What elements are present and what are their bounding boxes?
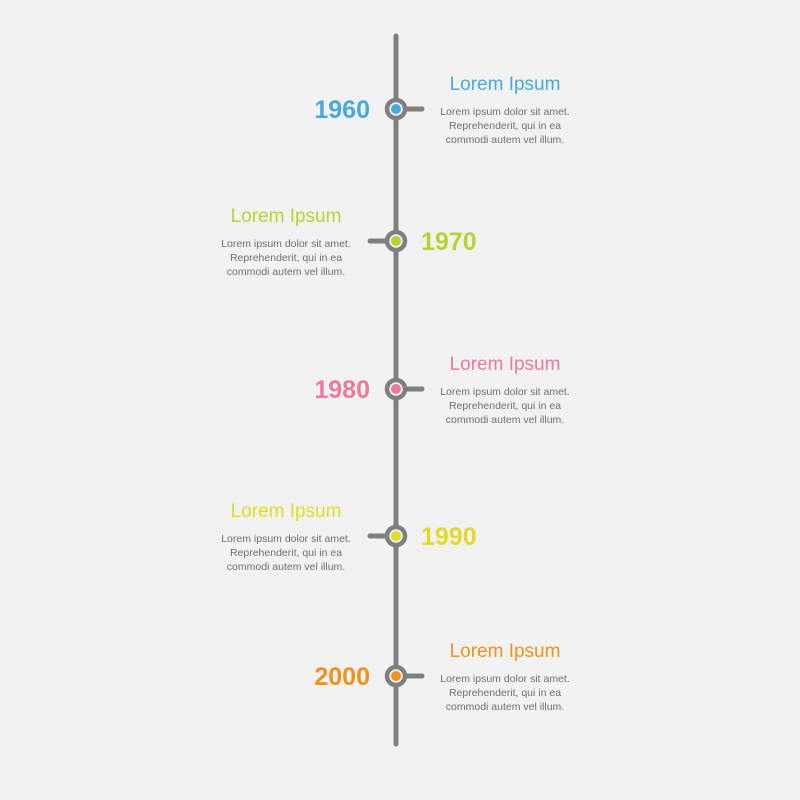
- event: 2000: commodi autem vel illum.: [446, 701, 564, 713]
- event: 1980: [314, 354, 570, 426]
- event: 1960: 1960: [314, 96, 370, 124]
- event: 1970: Reprehenderit, qui in ea: [230, 252, 342, 264]
- event: 1970: 1970: [421, 228, 477, 256]
- event: 1960: Lorem ipsum dolor sit amet.: [440, 106, 570, 118]
- event: 1970: Lorem Ipsum: [231, 206, 341, 227]
- event: 1980: 1980: [314, 376, 370, 404]
- event: 1970: commodi autem vel illum.: [227, 266, 345, 278]
- event: 1990: Reprehenderit, qui in ea: [230, 547, 342, 559]
- event: 1980: Reprehenderit, qui in ea: [449, 400, 561, 412]
- event: 1980: Lorem ipsum dolor sit amet.: [440, 386, 570, 398]
- event: 2000: Lorem ipsum dolor sit amet.: [440, 673, 570, 685]
- event: 2000: [314, 641, 570, 713]
- event: 1960: Reprehenderit, qui in ea: [449, 120, 561, 132]
- event: 1990: 1990: [421, 523, 477, 551]
- event: 1970: Lorem ipsum dolor sit amet.: [221, 238, 351, 250]
- event: 1960: commodi autem vel illum.: [446, 134, 564, 146]
- event: 1970: [221, 206, 477, 278]
- event: 1960: Lorem Ipsum: [450, 74, 560, 95]
- event: 1990: Lorem ipsum dolor sit amet.: [221, 533, 351, 545]
- event: 2000: Reprehenderit, qui in ea: [449, 687, 561, 699]
- event: 1960: [314, 74, 570, 146]
- timeline axis: [394, 36, 398, 744]
- event: 1990: [221, 501, 477, 573]
- event: 2000: 2000: [314, 663, 370, 691]
- event: 1990: Lorem Ipsum: [231, 501, 341, 522]
- event: 1980: commodi autem vel illum.: [446, 414, 564, 426]
- event: 2000: Lorem Ipsum: [450, 641, 560, 662]
- event: 1980: Lorem Ipsum: [450, 354, 560, 375]
- event: 1990: commodi autem vel illum.: [227, 561, 345, 573]
